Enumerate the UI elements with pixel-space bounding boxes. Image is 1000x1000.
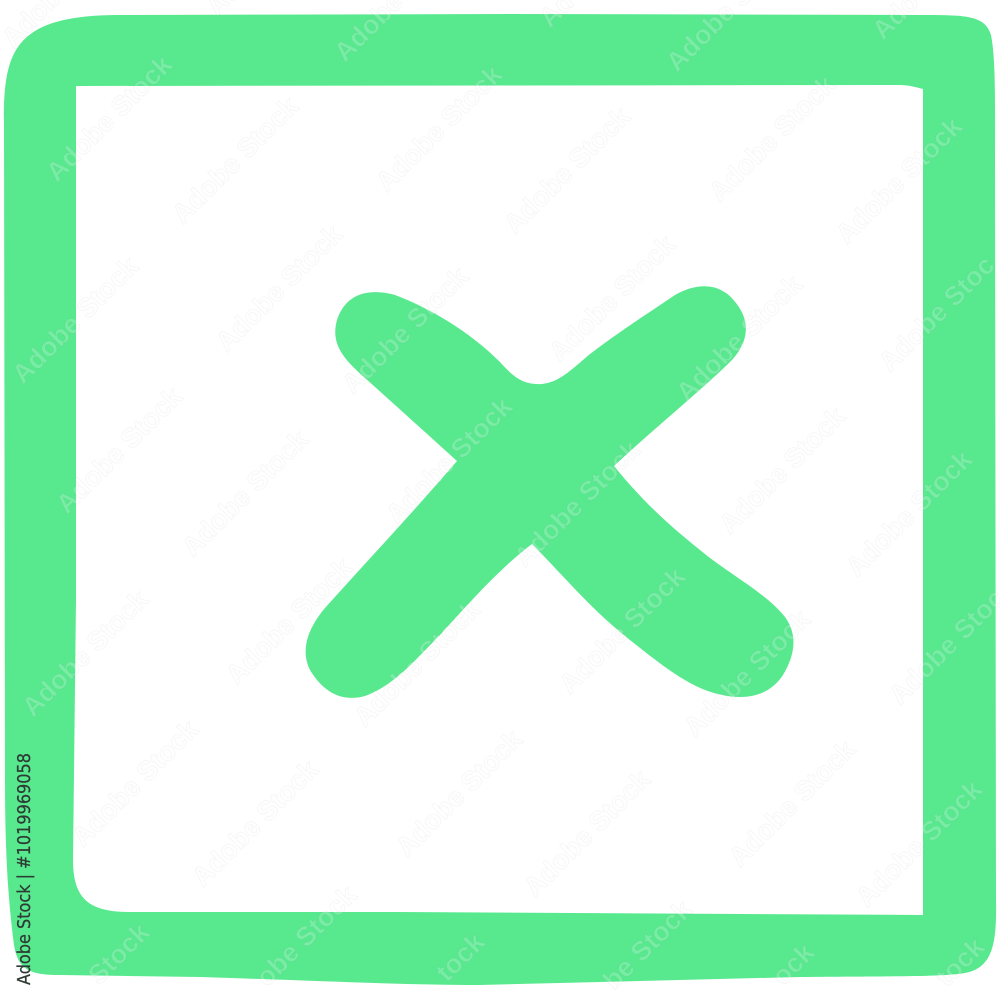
watermark pattern: Stock [82, 916, 156, 990]
watermark pattern: Adobe Stock [380, 391, 519, 529]
watermark pattern: Adobe Stock [850, 774, 989, 912]
watermark pattern: Adobe Stock [543, 229, 682, 367]
watermark pattern: Adobe Stock [553, 561, 692, 699]
icon: cross mark [306, 286, 793, 698]
watermark pattern: Adobe Stock [16, 584, 155, 722]
watermark pattern: Adobe Stock [176, 424, 315, 562]
watermark pattern: Adobe Stock [210, 219, 349, 357]
watermark pattern: obe Stock [250, 879, 363, 992]
watermark pattern: Adobe Stock [518, 764, 657, 902]
watermark pattern: Adobe Stock [50, 381, 189, 519]
watermark pattern: Adobe Stock [166, 91, 305, 229]
watermark pattern: Adobe Stock [840, 444, 979, 582]
watermark pattern: Adobe Stock [186, 754, 325, 892]
watermark pattern: be Stock [597, 894, 699, 995]
watermark id text: Adobe Stock | #1019969058 [15, 753, 35, 985]
watermark pattern: Adobe Stock [370, 59, 509, 197]
watermark pattern: Adobe Stoc [873, 250, 1000, 377]
watermark pattern: Adobe Stock [678, 604, 817, 742]
watermark pattern: Adobe Stock [703, 69, 842, 207]
watermark pattern: Adobe Stock [670, 269, 809, 407]
watermark pattern: tock [430, 926, 491, 987]
watermark pattern: Adobe Stock [220, 552, 359, 690]
watermark pattern: Adobe Stock [830, 111, 969, 249]
watermark pattern: ock [766, 936, 821, 991]
watermark pattern: Adobe Stock [336, 261, 475, 399]
watermark pattern: Adobe Stock [390, 724, 529, 862]
watermark pattern: tock [930, 931, 991, 992]
watermark pattern: Adobe Stock [713, 401, 852, 539]
watermark pattern: Adobe Stock [498, 101, 637, 239]
watermark pattern: Adobe Stock [723, 734, 862, 872]
watermark pattern: Adobe Stock [40, 49, 179, 187]
watermark pattern: Adobe Stock [348, 594, 487, 732]
watermark pattern: Adobe Stock [66, 714, 205, 852]
watermark pattern: Adobe Stock [508, 434, 647, 572]
watermark pattern: Adobe Stock [6, 251, 145, 389]
